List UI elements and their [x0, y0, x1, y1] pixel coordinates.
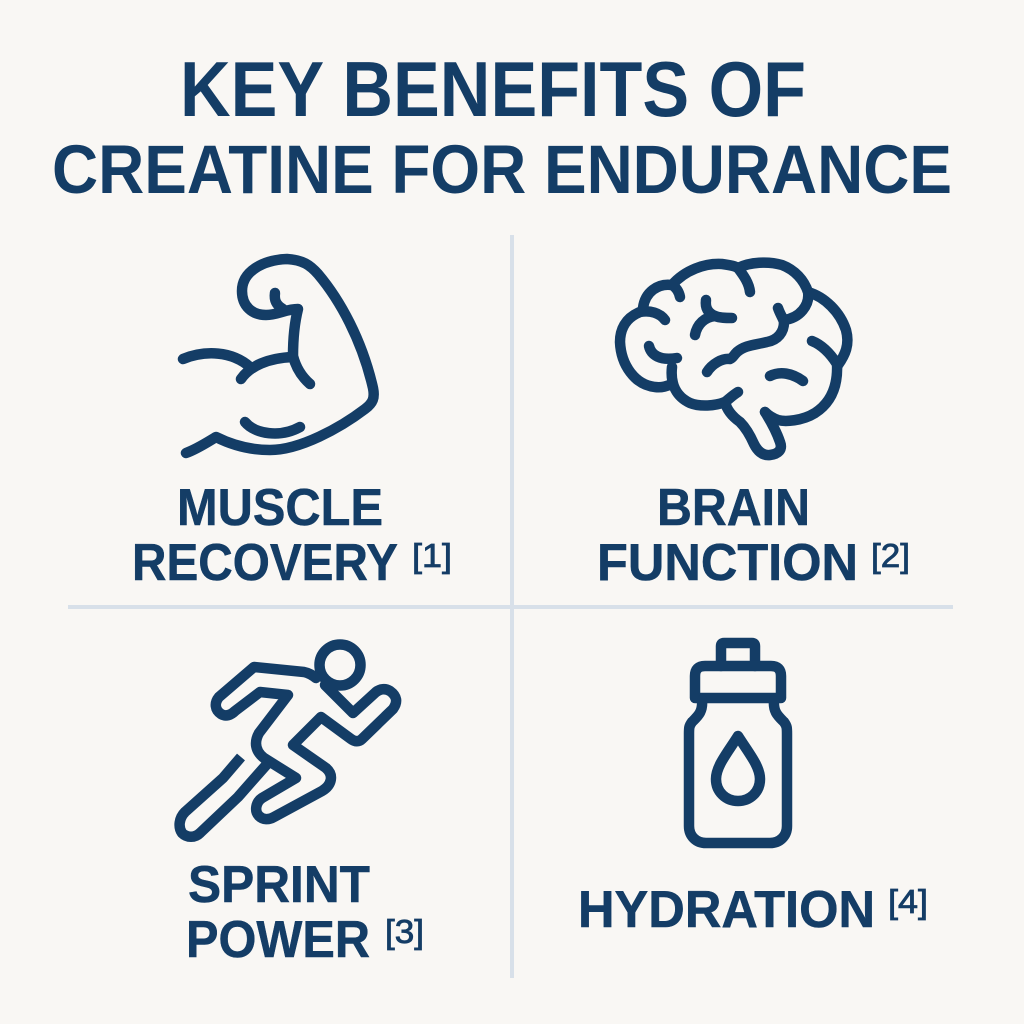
label: sprint power: [3] [385, 913, 424, 950]
panel: sprint power [180, 644, 424, 969]
title [52, 45, 952, 208]
label: muscle recovery: [1] [412, 537, 452, 574]
panel: muscle recovery [132, 259, 452, 592]
label: muscle recovery [132, 479, 452, 592]
label: brain function: [2] [871, 537, 910, 574]
panel: brain function [597, 263, 910, 592]
icon: runner [180, 644, 396, 837]
label: brain function: FUNCTION [597, 534, 858, 592]
label: hydration: HYDRATION [578, 881, 875, 939]
label: brain function [597, 479, 910, 592]
label: muscle recovery: MUSCLE [177, 479, 383, 537]
icon: water bottle [689, 643, 787, 843]
title: CREATINE FOR ENDURANCE [52, 131, 952, 208]
icon: flexed arm [183, 259, 374, 453]
icon: brain [620, 263, 847, 455]
label: sprint power: POWER [186, 911, 370, 969]
label: sprint power [186, 856, 424, 969]
label: sprint power: SPRINT [188, 856, 370, 914]
title: KEY BENEFITS OF [180, 45, 806, 133]
label: brain function: BRAIN [657, 479, 810, 537]
label: hydration: [4] [888, 883, 928, 920]
label: muscle recovery: RECOVERY [132, 534, 398, 592]
panel: hydration [578, 643, 928, 939]
